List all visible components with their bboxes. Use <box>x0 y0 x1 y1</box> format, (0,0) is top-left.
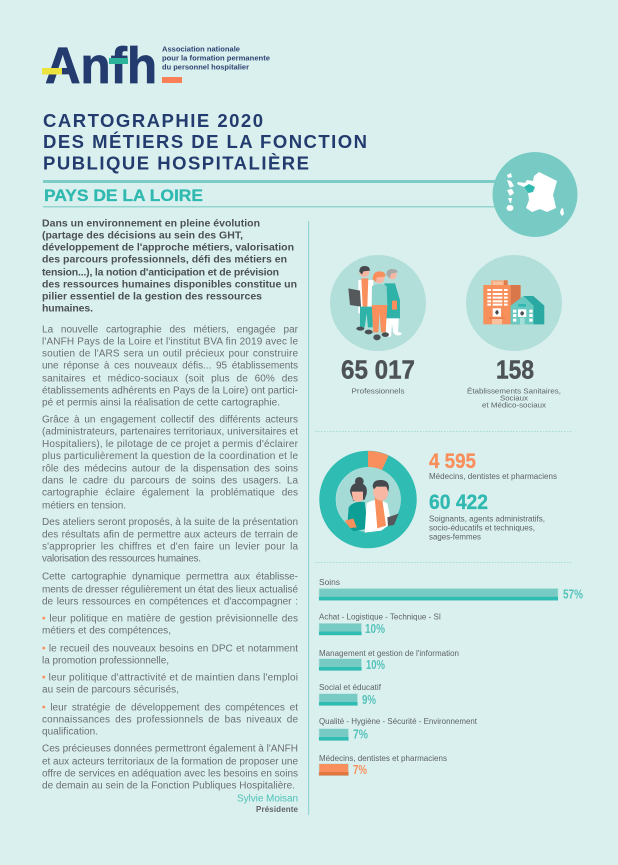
stat: professionals: 65 017 <box>341 354 415 384</box>
text: closing paragraph <box>42 744 298 792</box>
bar: Management: Management et gestion de l'information <box>319 649 459 658</box>
text: bullet list: la promotion professionnelle, <box>42 656 169 666</box>
text: paragraph on the new mapping: établissements adhérents en Pays de la Loire) ont partici- <box>42 386 298 396</box>
bar: Qualité: Qualité - Hygiène - Sécurité - Environnement <box>319 717 478 726</box>
logo: Anfh: Anfh <box>45 37 157 94</box>
text: paragraph on collective commitment: dans le cadre du parcours de soins des usagers. La <box>42 476 298 486</box>
title: PUBLIQUE HOSPITALIÈRE <box>43 152 309 174</box>
heading: Pays de la Loire <box>43 180 497 208</box>
bar: Achat: 10% <box>365 622 385 636</box>
text: paragraph on workshops: valorisation des ressources humaines. <box>42 554 201 564</box>
text: introduction in bold: des ressources humaines disponibles constitue un <box>42 278 297 290</box>
stat: establishments: Sociaux <box>500 394 528 402</box>
text: introduction in bold: des parcours professionnels, défi des métiers en <box>42 254 287 266</box>
text: bullet list: connaissances des professionnels de bas niveaux de <box>42 714 298 726</box>
text: paragraph on workshops: s'approprier les chiffres et d'en faire un levier pour la <box>42 542 298 552</box>
text: bullet list <box>42 614 298 738</box>
bar: Soins <box>319 578 583 602</box>
stat: care and other staff: socio-éducatifs et techniques, <box>429 524 535 532</box>
bar: Soins: Soins <box>319 578 340 587</box>
signature: Sylvie Moisan <box>237 794 298 804</box>
text: paragraph on the new mapping <box>42 324 299 408</box>
bar: Management: 10% <box>366 658 385 672</box>
logo: Anfh: du personnel hospitalier <box>162 64 249 72</box>
bar: Médecins: 7% <box>353 763 367 777</box>
text: paragraph on the new mapping: une réponse à ces nouveaux défis... 95 établissements <box>42 360 298 372</box>
text: closing paragraph: et aux acteurs territoriaux de la formation de proposer une <box>42 756 298 768</box>
stat: establishments: et Médico-sociaux <box>482 400 546 410</box>
stat: establishments: 158 <box>496 354 534 384</box>
logo: Anfh: Association nationale <box>162 46 240 54</box>
text: paragraph on collective commitment: cartographie éclaire également la problématique des <box>42 488 298 498</box>
text: bullet list: au sein de parcours sécurisés, <box>42 684 179 696</box>
bar: Qualité: 7% <box>353 728 368 742</box>
text: paragraph on collective commitment: plus particulièrement la question de la coordination et le <box>42 451 298 462</box>
text: paragraph on dynamic mapping: de leurs ressources en compétences et d'accompagner : <box>42 596 298 608</box>
signature <box>237 794 299 814</box>
heading: Pays de la Loire: PAYS DE LA LOIRE <box>44 187 203 205</box>
bar: Qualité <box>319 717 478 742</box>
text: bullet list: • le recueil des nouveaux besoins en DPC et notamment <box>42 644 298 654</box>
text: paragraph on collective commitment: métiers en tension. <box>42 500 126 512</box>
text: paragraph on dynamic mapping: Cette cartographie dynamique permettra aux établisse- <box>42 572 298 582</box>
text: introduction in bold: Dans un environnement en pleine évolution <box>42 218 260 230</box>
stat: professionals <box>341 354 415 396</box>
icon: hospital buildings <box>466 255 562 351</box>
stat: doctors <box>429 450 557 481</box>
text: bullet list: qualification. <box>42 726 98 738</box>
text: introduction in bold: (partage des décisions au sein des GHT, <box>42 230 243 242</box>
text: paragraph on dynamic mapping: ments de dresser régulièrement un état des lieux actualisé <box>42 584 298 596</box>
text: paragraph on collective commitment: rôle des médecins autour de la dispensation des soins <box>42 464 298 474</box>
bar: Management <box>319 649 459 672</box>
stat: establishments: Établissements Sanitaires, <box>467 386 561 396</box>
stat: professionals: Professionnels <box>352 386 405 396</box>
icon: health professionals <box>330 255 426 351</box>
bar: Achat: Achat - Logistique - Technique - SI <box>319 612 441 622</box>
stat: care and other staff <box>429 491 545 542</box>
text: paragraph on the new mapping: l'ANFH Pays de la Loire et l'institut BVA fin 2019 avec le <box>42 336 298 348</box>
text: bullet list: • leur politique en matière de gestion prévisionnelle des <box>42 614 298 624</box>
stat: establishments <box>467 354 561 410</box>
text: paragraph on the new mapping: soutien de l'ARS sera un outil précieux pour construire <box>42 348 298 360</box>
title: DES MÉTIERS DE LA FONCTION <box>43 131 367 152</box>
text: paragraph on workshops: Des ateliers seront proposés, à la suite de la présentation <box>42 517 298 528</box>
text: closing paragraph: offre de services en adéquation avec les besoins en soins <box>42 768 298 780</box>
text: paragraph on workshops <box>42 517 298 564</box>
text: bullet list: métiers et des compétences, <box>42 626 171 636</box>
text: paragraph on collective commitment: (administrateurs, partenaires territoriaux, universitaires et <box>42 426 298 438</box>
stat: doctors: Médecins, dentistes et pharmaciens <box>429 472 557 481</box>
text: bullet list: • leur politique d'attractivité et de maintien dans l'emploi <box>42 672 298 684</box>
text: introduction in bold: tension...), la notion d'anticipation et de prévision <box>42 266 279 278</box>
text: introduction in bold: humaines. <box>42 302 93 314</box>
logo: Anfh: pour la formation permanente <box>162 56 270 62</box>
text: bullet list: • leur stratégie de développement des compétences et <box>42 702 298 714</box>
bar: Social <box>319 683 382 707</box>
text: paragraph on workshops: des résultats afin de permettre aux acteurs de terrain de <box>42 530 298 540</box>
text: introduction in bold <box>42 218 297 314</box>
text: closing paragraph: de demain au sein de la Fonction Publiques Hospitalière. <box>42 780 295 792</box>
bar: Médecins <box>319 754 447 777</box>
text: paragraph on the new mapping: pé et permis ainsi la réalisation de cette cartographie. <box>42 398 280 408</box>
text: paragraph on collective commitment: Hospitaliers), le pilotage de ce projet a permis d'éclairer <box>42 439 299 450</box>
text: introduction in bold: pilier essentiel de la gestion des ressources <box>42 290 262 302</box>
bar: Soins: 57% <box>563 588 583 602</box>
signature: Présidente <box>256 805 299 814</box>
donut chart: staff split <box>328 451 408 540</box>
text: paragraph on collective commitment: Grâce à un engagement collectif des différents acteurs <box>42 414 298 426</box>
bar chart: staff by professional family <box>319 578 583 777</box>
text: paragraph on the new mapping: La nouvelle cartographie des métiers, engagée par <box>42 324 299 336</box>
stat: doctors: 4 595 <box>429 450 476 473</box>
title <box>43 110 367 174</box>
logo: Anfh <box>42 37 270 94</box>
divider: column rule <box>308 221 309 815</box>
stat: care and other staff: Soignants, agents administratifs, <box>429 514 545 524</box>
stat: care and other staff: 60 422 <box>429 491 488 514</box>
text: paragraph on dynamic mapping <box>42 572 298 608</box>
text: paragraph on the new mapping: sanitaires et médico-sociaux (soit plus de 60% des <box>42 374 298 384</box>
bar: Social: Social et éducatif <box>319 683 382 692</box>
stat: care and other staff: sages-femmes <box>429 532 481 542</box>
bar: Médecins: Médecins, dentistes et pharmaciens <box>319 754 447 763</box>
text: paragraph on collective commitment <box>42 414 299 512</box>
bar: Achat <box>319 612 441 636</box>
bar: Social: 9% <box>362 693 376 707</box>
title: CARTOGRAPHIE 2020 <box>43 110 263 131</box>
icon: map of France <box>492 152 578 237</box>
text: closing paragraph: Ces précieuses données permettront également à l'ANFH <box>42 744 298 754</box>
text: introduction in bold: développement de l'approche métiers, valorisation <box>42 242 294 254</box>
